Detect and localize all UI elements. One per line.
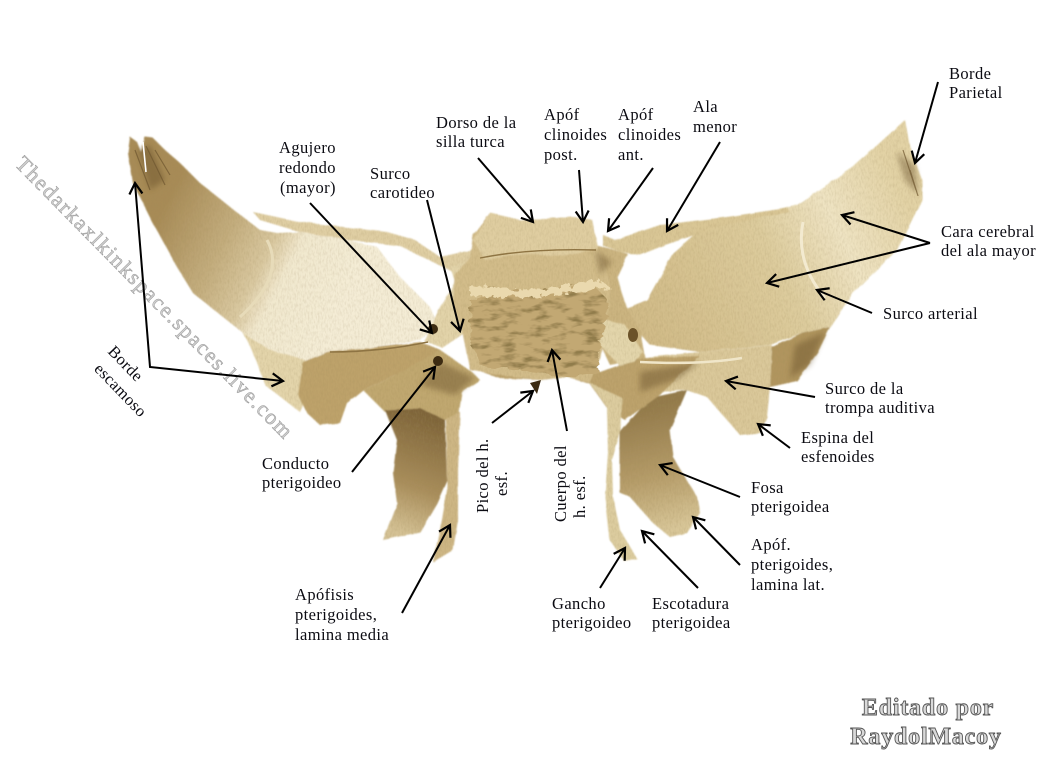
right greater wing bbox=[627, 120, 922, 352]
left carotid groove bbox=[424, 260, 478, 348]
label: Pico del h. esf.: esf. bbox=[492, 471, 511, 496]
label: Apóf clinoides ant.: clinoides bbox=[618, 125, 681, 144]
sella dorsum bbox=[473, 213, 598, 260]
arrow: lamina lat bbox=[693, 517, 740, 565]
arrow: Cara cerebral lower bbox=[767, 243, 930, 283]
label: Agujero redondo (mayor): (mayor) bbox=[280, 178, 336, 197]
right medial pterygoid plate bbox=[590, 383, 638, 560]
signature: Editado por RaydolMacoy: Editado por bbox=[862, 695, 994, 721]
label: Apófisis pterigoides, lamina media: Apófisis bbox=[295, 585, 354, 604]
right lateral pterygoid plate bbox=[620, 390, 700, 537]
arrow: Agujero redondo bbox=[310, 203, 432, 333]
left squamous border bbox=[243, 333, 308, 412]
label: Agujero redondo (mayor): redondo bbox=[279, 158, 336, 177]
arrow: Borde Parietal bbox=[915, 82, 938, 163]
right connection bbox=[595, 245, 645, 365]
label: Pico del h. esf. bbox=[473, 438, 511, 513]
label: Escotadura pterigoidea: Escotadura bbox=[652, 594, 730, 613]
left medial pterygoid plate bbox=[433, 412, 460, 562]
left lesser wing bbox=[253, 212, 476, 272]
right squamous border bbox=[770, 327, 830, 387]
body bbox=[452, 213, 610, 383]
arrow: Surco arterial bbox=[817, 290, 872, 313]
label: Pico del h. esf.: Pico del h. bbox=[473, 438, 492, 513]
label: Cuerpo del h. esf. bbox=[551, 445, 589, 522]
label: Apóf clinoides ant.: Apóf bbox=[618, 105, 654, 124]
arrow: lamina media bbox=[402, 525, 450, 613]
label: Surco carotideo: Surco bbox=[370, 164, 410, 183]
label: Apóf. pterigoides, lamina lat.: pterigoides, bbox=[751, 555, 833, 574]
label: Surco de la trompa auditiva: Surco de la bbox=[825, 379, 904, 398]
arrow: Espina bbox=[758, 424, 790, 448]
label: Escotadura pterigoidea: pterigoidea bbox=[652, 613, 731, 632]
label: Apóf clinoides post.: post. bbox=[544, 145, 578, 164]
label: Gancho pterigoideo: Gancho bbox=[552, 594, 606, 613]
arrow: Conducto pterigoideo bbox=[352, 367, 435, 472]
label: Fosa pterigoidea: pterigoidea bbox=[751, 497, 830, 516]
wing tip striations bbox=[135, 146, 918, 196]
label: Espina del esfenoides: esfenoides bbox=[801, 447, 875, 466]
left lateral pterygoid plate bbox=[383, 408, 447, 540]
right block bbox=[600, 318, 643, 366]
wing tip cleft bbox=[143, 142, 146, 172]
wing ridges bbox=[240, 222, 825, 363]
label: Dorso de la silla turca: Dorso de la bbox=[436, 113, 517, 132]
label: Apófisis pterigoides, lamina media: pterigoides, bbox=[295, 605, 377, 624]
label: Dorso de la silla turca: silla turca bbox=[436, 132, 505, 151]
left under base bbox=[363, 350, 480, 420]
label: Apóf. pterigoides, lamina lat.: Apóf. bbox=[751, 535, 791, 554]
light cream rough edge bbox=[470, 280, 610, 297]
arrow: Dorso bbox=[478, 158, 533, 222]
watermark: Thedarkaxlkinkspace.spaces.live.com bbox=[10, 151, 298, 443]
label: Cara cerebral del ala mayor: Cara cerebral bbox=[941, 222, 1035, 241]
illustration: sphenoid bone bbox=[128, 120, 922, 562]
label: Espina del esfenoides: Espina del bbox=[801, 428, 874, 447]
label: Apóf clinoides ant.: ant. bbox=[618, 145, 644, 164]
label: Conducto pterigoideo: Conducto bbox=[262, 454, 329, 473]
arrow: Trompa bbox=[726, 381, 815, 397]
label: Ala menor: menor bbox=[693, 117, 737, 136]
label: Apófisis pterigoides, lamina media: lamina media bbox=[295, 625, 389, 644]
label: Cuerpo del h. esf.: Cuerpo del bbox=[551, 445, 570, 522]
label: Apóf clinoides post.: clinoides bbox=[544, 125, 607, 144]
label: Apóf. pterigoides, lamina lat.: lamina lat. bbox=[751, 575, 825, 594]
arrow: Cuerpo bbox=[552, 350, 567, 431]
arrow: Surco carotideo bbox=[427, 200, 460, 331]
label: Cuerpo del h. esf.: h. esf. bbox=[570, 475, 589, 518]
arrow: Fosa bbox=[660, 465, 740, 497]
arrow: Ala menor bbox=[667, 142, 720, 231]
left spine region bbox=[298, 342, 440, 425]
label: Ala menor: Ala bbox=[693, 97, 718, 116]
arrows bbox=[135, 82, 938, 613]
label: Borde Parietal: Borde bbox=[949, 64, 991, 83]
label: Conducto pterigoideo: pterigoideo bbox=[262, 473, 342, 492]
arrow: Escotadura bbox=[642, 531, 698, 588]
label: Borde escamoso bbox=[88, 342, 167, 421]
label: Gancho pterigoideo: pterigoideo bbox=[552, 613, 632, 632]
label: Fosa pterigoidea: Fosa bbox=[751, 478, 784, 497]
label: Borde Parietal: Parietal bbox=[949, 83, 1003, 102]
right lesser wing bbox=[603, 208, 790, 255]
label: Cara cerebral del ala mayor: del ala mayor bbox=[941, 241, 1036, 260]
left greater wing bbox=[128, 137, 437, 362]
rough central surface bbox=[470, 282, 608, 377]
dark shading marks bbox=[138, 145, 918, 395]
label: Apóf clinoides post.: Apóf bbox=[544, 105, 580, 124]
label: Surco de la trompa auditiva: trompa auditiva bbox=[825, 398, 935, 417]
label: Surco arterial: Surco arterial bbox=[883, 304, 978, 323]
arrow: Gancho bbox=[600, 548, 625, 588]
bone shapes bbox=[128, 120, 922, 562]
label: Borde escamoso: escamoso bbox=[90, 359, 151, 421]
right spine region bbox=[640, 345, 772, 435]
signature: Editado por RaydolMacoy: RaydolMacoy bbox=[850, 724, 1002, 750]
arrow: Borde escamoso bbox=[135, 183, 283, 381]
arrow: Apóf post bbox=[579, 170, 583, 222]
arrow: Cara cerebral upper bbox=[842, 215, 930, 243]
label: Borde escamoso: Borde bbox=[104, 342, 147, 385]
label: Agujero redondo (mayor): Agujero bbox=[279, 138, 336, 157]
arrow: Apóf ant bbox=[608, 168, 653, 231]
arrow: Pico bbox=[492, 391, 533, 423]
right under base bbox=[470, 356, 700, 420]
label: Surco carotideo: carotideo bbox=[370, 183, 435, 202]
foramina bbox=[428, 324, 638, 394]
